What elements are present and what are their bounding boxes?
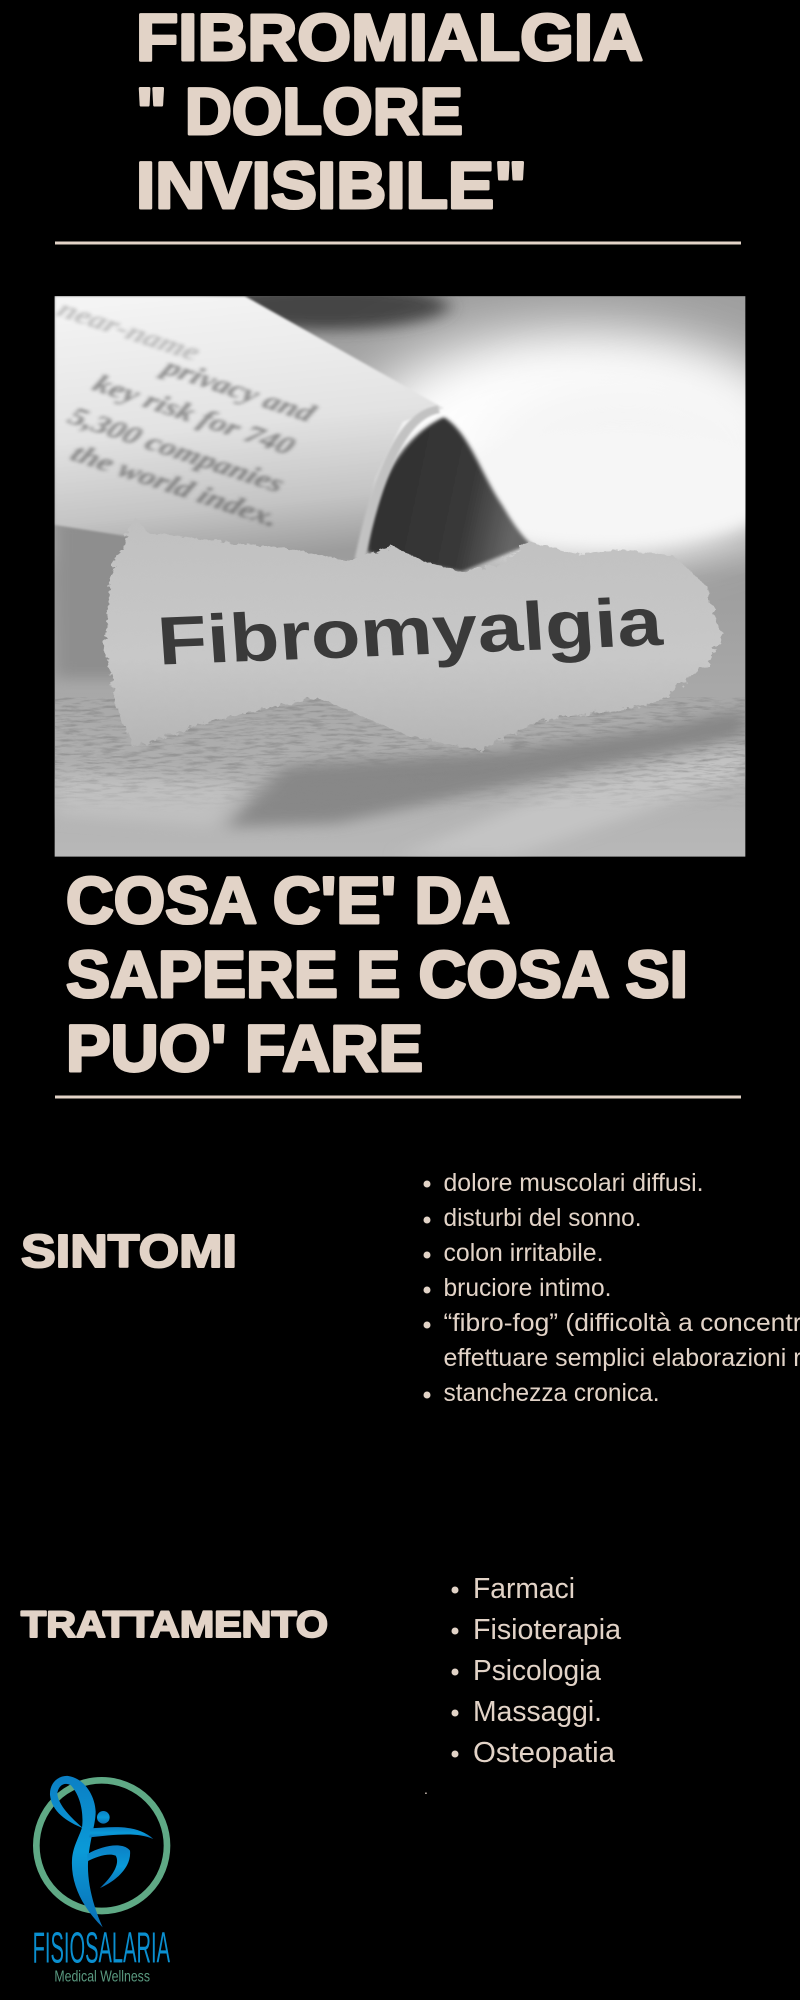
photo: torn newspaper strip reading Fibromyalgia: Fibromyalgia bbox=[155, 584, 666, 680]
blurred newspaper copy: the world index. bbox=[66, 439, 285, 533]
list: trattamento: Osteopatia bbox=[473, 1737, 616, 1769]
heading: sintomi: SINTOMI bbox=[21, 1225, 237, 1277]
title: INVISIBILE" bbox=[136, 148, 527, 222]
heading: cosa c'e' da sapere: PUO' FARE bbox=[66, 1011, 423, 1085]
blurred newspaper copy: 5,300 companies bbox=[63, 402, 290, 498]
icon: green ring bbox=[36, 1780, 167, 1911]
list: trattamento bbox=[424, 1573, 622, 1797]
list: trattamento: . bbox=[424, 1781, 428, 1797]
list: sintomi: effettuare semplici elaborazioni r bbox=[444, 1344, 800, 1372]
title bbox=[136, 0, 643, 222]
heading: cosa c'e' da sapere bbox=[66, 863, 688, 1085]
list: trattamento: Farmaci bbox=[473, 1573, 575, 1605]
title: FIBROMIALGIA bbox=[136, 0, 643, 74]
list: sintomi bbox=[424, 1169, 800, 1407]
desk texture bbox=[55, 709, 745, 857]
list: sintomi: “fibro-fog” (difficoltà a concentr bbox=[444, 1309, 800, 1337]
list: sintomi: dolore muscolari diffusi. bbox=[444, 1169, 704, 1197]
blurred newspaper copy: key risk for 740 bbox=[88, 369, 300, 461]
blurred newspaper copy bbox=[52, 295, 322, 533]
list: trattamento: Fisioterapia bbox=[473, 1614, 622, 1646]
title: " DOLORE bbox=[136, 74, 463, 148]
list: sintomi: stanchezza cronica. bbox=[444, 1379, 660, 1407]
list: trattamento: Psicologia bbox=[473, 1655, 602, 1687]
heading: cosa c'e' da sapere: SAPERE E COSA SI bbox=[66, 937, 688, 1011]
list: sintomi: bruciore intimo. bbox=[444, 1274, 612, 1302]
text: FISIOSALARIA bbox=[33, 1923, 170, 1972]
icon: blue ribbon figure bbox=[50, 1776, 153, 1927]
logo tagline: Medical Wellness bbox=[54, 1969, 150, 1986]
blurred newspaper copy: privacy and bbox=[155, 352, 322, 428]
logo: Fisiosalaria bbox=[33, 1776, 170, 1986]
list: sintomi: disturbi del sonno. bbox=[444, 1204, 642, 1232]
list: trattamento: Massaggi. bbox=[473, 1696, 602, 1728]
blurred newspaper copy: near-name bbox=[52, 295, 206, 367]
photo: torn newspaper strip reading Fibromyalgia bbox=[52, 284, 800, 857]
heading: cosa c'e' da sapere: COSA C'E' DA bbox=[66, 863, 510, 937]
list: sintomi: colon irritabile. bbox=[444, 1239, 604, 1267]
heading: trattamento: TRATTAMENTO bbox=[21, 1604, 328, 1645]
